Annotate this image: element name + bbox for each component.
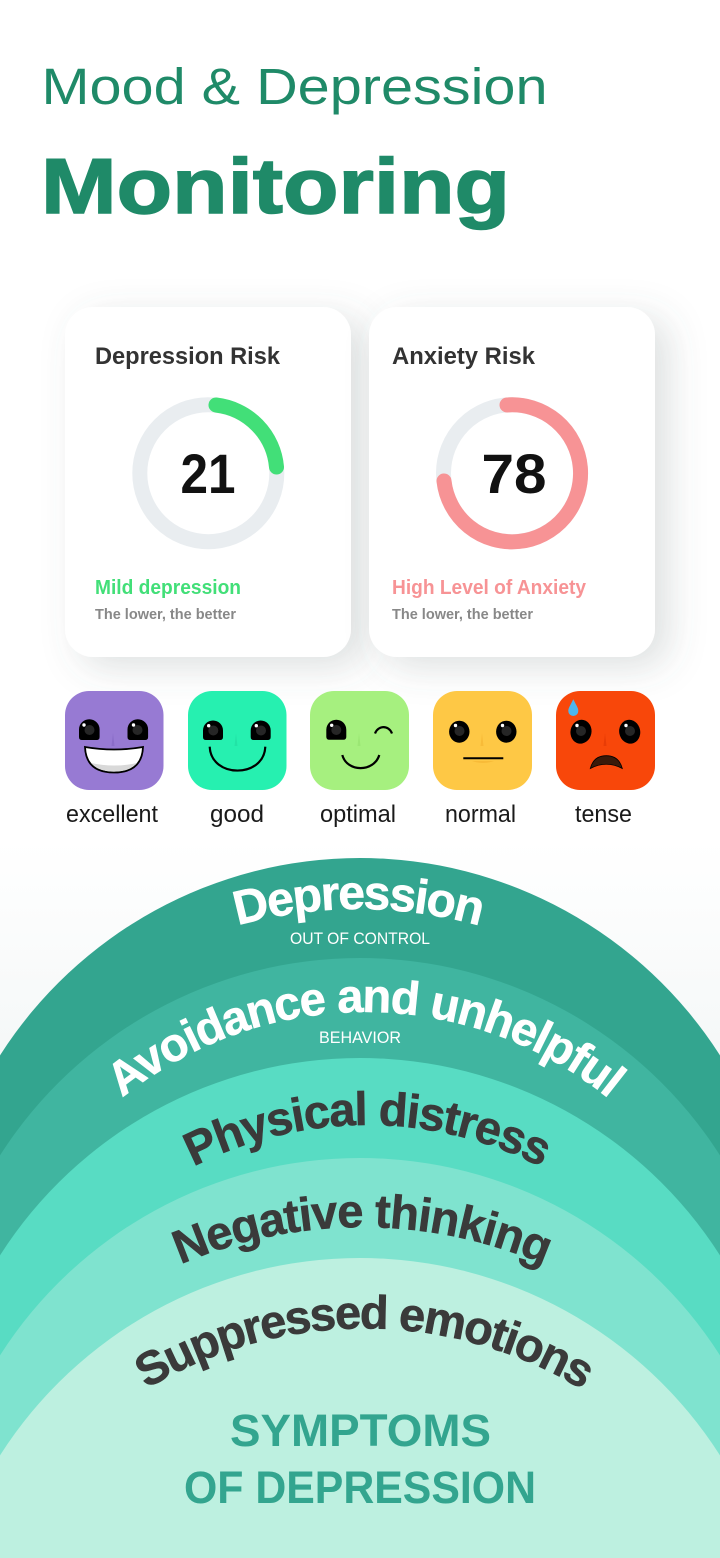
arc label: depression: Depression — [232, 878, 482, 926]
label: optimal: optimal — [320, 801, 396, 828]
heading: anxiety risk: Anxiety Risk — [392, 343, 536, 370]
heading: depression risk: Depression Risk — [95, 343, 281, 370]
icon: good face — [188, 691, 286, 790]
arc layer: negative thinking — [0, 1158, 720, 1456]
heading: symptoms of depression: OF DEPRESSION — [184, 1462, 536, 1513]
arc layer: depression — [0, 858, 720, 1156]
panel: depression risk — [65, 307, 351, 657]
heading: symptoms of depression — [184, 1405, 536, 1513]
arc layer: suppressed emotions — [0, 1258, 720, 1558]
note: The lower, the better — [95, 606, 236, 623]
ring chart: 78: 78 — [482, 442, 546, 505]
ring chart: 21: 21 — [180, 442, 236, 505]
arc label: suppressed emotions: Suppressed emotions — [136, 1294, 591, 1386]
title: Monitoring — [41, 142, 510, 230]
title — [41, 58, 548, 230]
heading: symptoms of depression: SYMPTOMS — [230, 1405, 491, 1456]
label: good: good — [210, 801, 264, 828]
ring chart: 21 — [140, 405, 277, 542]
icon: optimal face — [310, 691, 409, 790]
label: tense: tense — [575, 801, 632, 828]
panel: anxiety risk — [369, 307, 655, 657]
sublabel: behavior: BEHAVIOR — [319, 1028, 401, 1047]
note: The lower, the better — [392, 606, 533, 623]
ring chart: 78 — [444, 405, 581, 542]
status: high anxiety: High Level of Anxiety — [392, 577, 587, 599]
title: Mood & Depression — [42, 58, 548, 115]
arc layer: avoidance — [0, 958, 720, 1255]
arc label: negative thinking: Negative thinking — [171, 1194, 552, 1270]
icon: normal face — [433, 691, 532, 790]
arc label: avoidance and unhelpful: Avoidance and unhelpful — [112, 980, 628, 1098]
arc label: physical distress: Physical distress — [182, 1090, 548, 1166]
icon: excellent face — [65, 691, 164, 790]
label: excellent: excellent — [66, 801, 158, 828]
sublabel: out of control: OUT OF CONTROL — [290, 929, 430, 948]
icon: tense face — [556, 691, 655, 790]
label: normal: normal — [445, 801, 516, 828]
status: mild depression: Mild depression — [95, 577, 241, 599]
